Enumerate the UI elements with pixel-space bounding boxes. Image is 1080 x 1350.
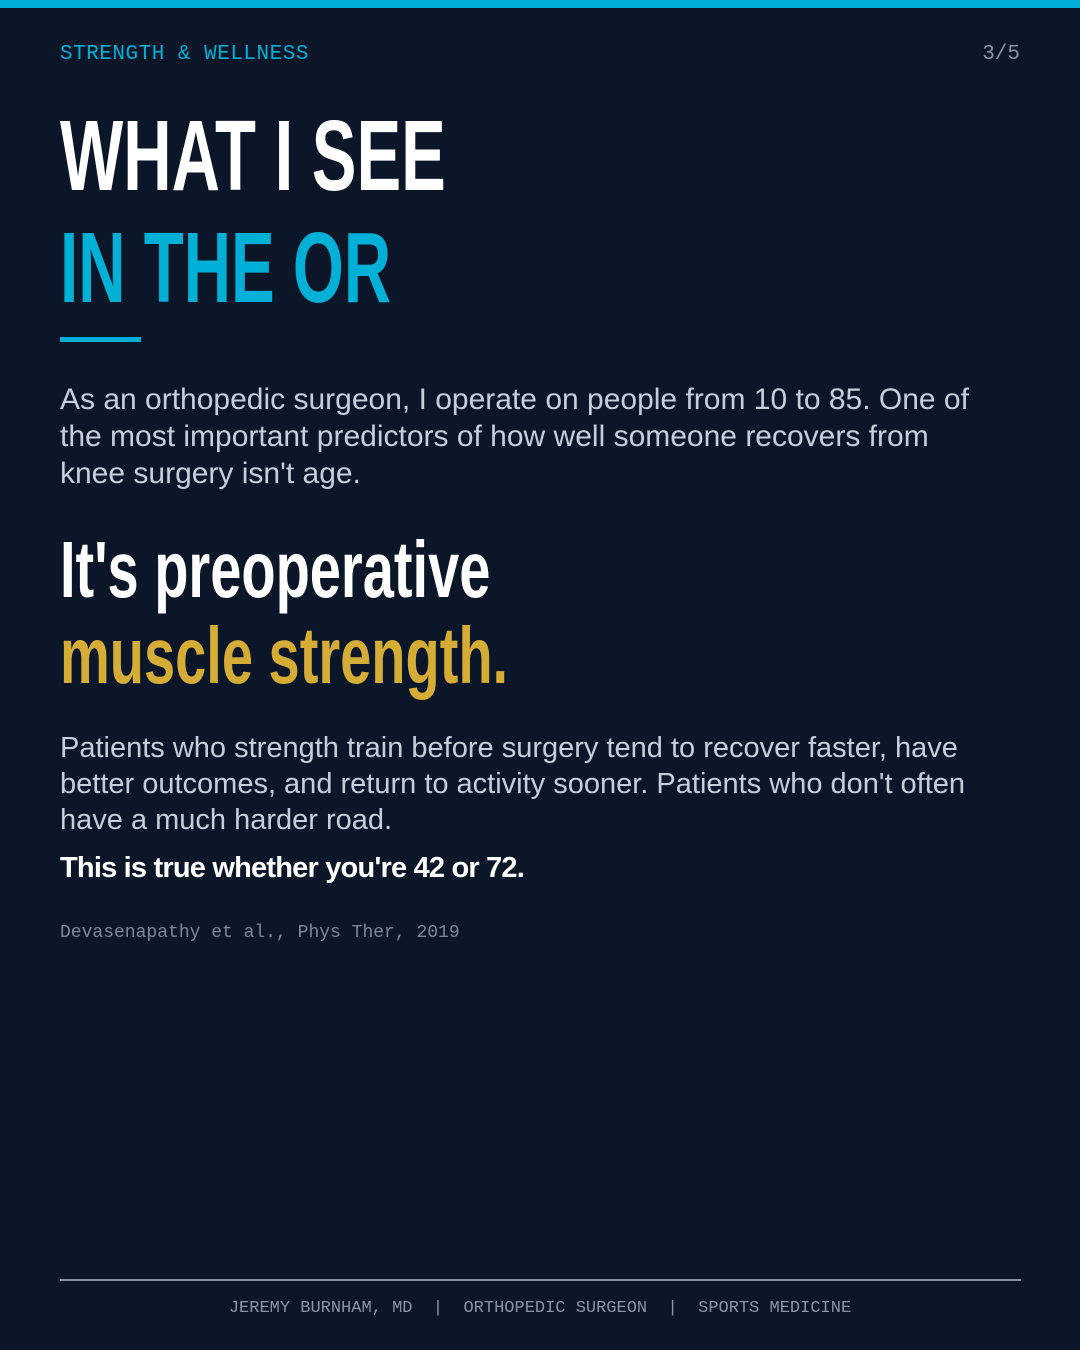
footer divider — [60, 1279, 1021, 1281]
emphasis line: This is true whether you're 42 or 72. — [60, 852, 524, 884]
title underline accent — [60, 337, 141, 342]
footer credits: JEREMY BURNHAM, MD | ORTHOPEDIC SURGEON | SPORTS MEDICINE — [229, 1299, 851, 1318]
citation: Devasenapathy et al., Phys Ther, 2019 — [60, 923, 460, 943]
title line 1: WHAT I SEE — [60, 100, 446, 212]
top accent bar — [0, 0, 1080, 8]
intro paragraph: As an orthopedic surgeon, I operate on people from 10 to 85. One of the most important predictors of how well someone recovers from knee surgery isn't age. — [60, 383, 969, 490]
page number: 3/5 — [982, 43, 1020, 66]
explanation paragraph: Patients who strength train before surgery tend to recover faster, have better outcomes, and return to activity sooner. Patients who don't often have a much harder road. — [60, 732, 965, 836]
series label: STRENGTH & WELLNESS — [60, 43, 309, 66]
title — [60, 100, 446, 324]
statement line 2: muscle strength. — [60, 611, 508, 700]
statement line 1: It's preoperative — [60, 525, 490, 614]
key statement — [60, 525, 508, 700]
title line 2: IN THE OR — [60, 212, 391, 324]
